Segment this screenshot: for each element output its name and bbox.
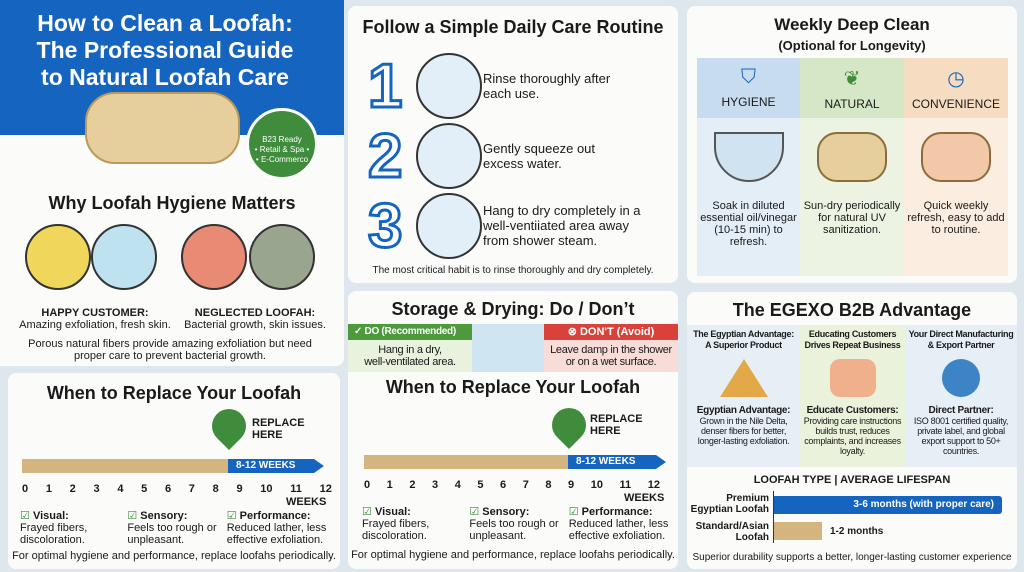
column: convenience (904, 58, 1008, 276)
text: happy customer: Amazing exfoliation, fresh skin. (19, 319, 171, 331)
text: happy customer (19, 307, 171, 331)
step 2: 2 (368, 122, 402, 191)
text: neglected: Bacterial growth, skin issues. (184, 319, 326, 331)
checklist: ☑ Sensory: (469, 506, 529, 518)
checklist: Reduced lather, less effective exfoliation. (569, 518, 668, 542)
icon: happy face (25, 224, 91, 290)
column: hygiene: Soak in diluted essential oil/vinegar (10-15 min) to refresh. (700, 200, 797, 248)
axis labels: 6 (500, 479, 506, 491)
footer text: For optimal hygiene and performance, replace loofahs periodically. (12, 550, 336, 562)
heading: (Optional for Longevity) (778, 38, 926, 53)
column: hygiene (697, 58, 800, 276)
label: replace here: REPLACE (590, 413, 643, 425)
badge: B23 Ready (262, 135, 302, 144)
footer text: Superior durability supports a better, longer-lasting customer experience (692, 552, 1012, 563)
step 2: Gently squeeze out (483, 141, 595, 156)
axis labels: 7 (189, 483, 195, 495)
timeline bar (22, 459, 324, 473)
panel: replace left (8, 373, 340, 569)
checklist: ☑ Sensory: (127, 510, 187, 522)
axis labels: 12 (648, 479, 660, 491)
axis labels: 8 (545, 479, 552, 491)
label: replace here: REPLACE (252, 417, 305, 429)
title: How to Clean a Loofah: (37, 10, 293, 36)
checklist: Feels too rough or unpleasant. (469, 518, 559, 542)
axis labels: 3 (93, 483, 100, 495)
bar chart: lifespan: LOOFAH TYPE | AVERAGE LIFESPAN (754, 474, 950, 486)
do box: Hang in a dry, (378, 344, 442, 356)
do box: well-ventilated area. (364, 356, 456, 368)
column: educate: Educate Customers: (807, 405, 898, 416)
column: egyptian: Egyptian Advantage: (697, 405, 790, 416)
dont box (544, 324, 678, 372)
dont box: Leave damp in the shower (550, 344, 672, 356)
heading: When to Replace Your Loofah (47, 383, 301, 403)
column: educate: Providing care instructions builds trust, reduces complaints, and increases loyalty. (804, 416, 901, 456)
bar chart: lifespan: Egyptian Loofah (691, 504, 769, 515)
column: egyptian (687, 325, 800, 467)
panel: weekly deep clean (687, 6, 1017, 283)
axis labels: 10 (260, 483, 273, 495)
axis labels: 8 (213, 483, 219, 495)
column: convenience: Quick weekly refresh, easy to add to routine. (907, 200, 1005, 236)
bar chart: lifespan: Premium (726, 493, 769, 504)
axis labels: 3 (432, 479, 438, 491)
column: partner: Your Direct Manufacturing (909, 329, 1013, 339)
axis labels: 1 (387, 479, 393, 491)
title: to Natural Loofah Care (41, 64, 289, 90)
label: replace here (252, 417, 305, 441)
column: hygiene: HYGIENE (721, 95, 776, 109)
checklist: ☑ Visual: (20, 510, 69, 522)
heading: Storage & Drying: Do / Don’t (392, 299, 634, 319)
heading: Follow a Simple Daily Care Routine (362, 17, 664, 37)
step 2 (368, 122, 595, 191)
panel: B2B advantage (687, 292, 1017, 569)
label: replace here: HERE (252, 429, 283, 441)
axis labels (364, 479, 660, 491)
checklist: Frayed fibers, discoloration. (362, 518, 429, 542)
timeline bar: 8-12 WEEKS (236, 460, 295, 471)
panel: replace left: WEEKS (286, 496, 326, 508)
header band (0, 0, 344, 135)
column: egyptian: A Superior Product (705, 340, 782, 350)
icon: sad face (181, 224, 247, 290)
axis labels: 2 (70, 483, 76, 495)
axis labels: 11 (620, 479, 631, 491)
step 3: well-ventiiated area away (483, 218, 629, 233)
axis labels: 2 (409, 479, 415, 491)
heading: replace: When to Replace Your Loofah (386, 377, 640, 397)
column: partner: & Export Partner (928, 340, 994, 350)
step 2: excess water. (483, 156, 562, 171)
title (36, 10, 293, 90)
checklist: Reduced lather, less effective exfoliation. (227, 522, 326, 546)
step 3: from shower steam. (483, 233, 597, 248)
column: educate: Drives Repeat Business (805, 340, 900, 350)
axis labels: 12 (320, 483, 332, 495)
checklist: Frayed fibers, discoloration. (20, 522, 87, 546)
do box (348, 324, 472, 372)
axis labels: 9 (568, 479, 574, 491)
badge: • Retail & Spa • (255, 145, 309, 154)
checklist (362, 506, 668, 542)
checklist: ☑ Visual: (362, 506, 411, 518)
axis labels (22, 483, 332, 495)
axis labels: 4 (117, 483, 123, 495)
panel: storage and replace: WEEKS (624, 492, 664, 504)
dont box: or on a wet surface. (566, 356, 656, 368)
bar chart: lifespan: Standard/Asian (696, 521, 769, 532)
step 3: Hang to dry completely in a (483, 203, 641, 218)
column: educate (800, 325, 905, 467)
bar chart: lifespan: 3-6 months (with proper care) (853, 499, 994, 510)
shower image (472, 324, 544, 372)
step 3: 3 (368, 192, 402, 261)
panel: daily care (348, 6, 678, 283)
badge (246, 108, 318, 180)
heading: The EGEXO B2B Advantage (733, 300, 971, 320)
icon: clean loofah (91, 224, 157, 290)
do box: ✓ DO (Recommended) (354, 326, 456, 337)
column: partner (905, 325, 1017, 467)
axis labels: 11 (290, 483, 302, 495)
axis labels: 6 (165, 483, 171, 495)
step 1: Rinse thoroughly after (483, 71, 610, 86)
icon: pin (205, 402, 253, 450)
icon: dirty loofah (249, 224, 315, 290)
axis labels: 1 (46, 483, 52, 495)
column: educate: Educating Customers (809, 329, 896, 339)
axis labels: 0 (364, 479, 370, 491)
footer text: The most critical habit is to rinse thoroughly and dry completely. (372, 265, 654, 276)
badge: • E-Commerco (256, 155, 308, 164)
column: natural: ❦ (844, 68, 860, 90)
checklist: ☑ Performance: (227, 510, 311, 522)
panel: storage and replace (348, 291, 678, 569)
axis labels: 5 (477, 479, 483, 491)
text: neglected (184, 307, 326, 331)
bar chart: lifespan (691, 474, 1002, 543)
label: replace here (590, 413, 643, 437)
caption: Porous natural fibers provide amazing exfoliation but need proper care to prevent bacterial growth. (28, 338, 312, 362)
axis labels: 7 (523, 479, 529, 491)
column: hygiene: ⛉ (741, 66, 756, 88)
text: neglected: NEGLECTED LOOFAH: (195, 307, 315, 319)
column: convenience: ◷ (947, 68, 965, 90)
axis labels: 0 (22, 483, 28, 495)
column: convenience: CONVENIENCE (912, 97, 1000, 111)
footer text: For optimal hygiene and performance, replace loofahs periodically. (351, 549, 675, 561)
bar chart: lifespan: 1-2 months (830, 526, 883, 537)
column: natural: NATURAL (824, 97, 880, 111)
column: partner: Direct Partner: (929, 405, 993, 416)
step 1: each use. (483, 86, 539, 101)
icon: pin (545, 401, 593, 449)
column: natural: Sun-dry periodically for natural UV sanitization. (804, 200, 900, 236)
heading: why hygiene: Why Loofah Hygiene Matters (48, 193, 296, 213)
column: egyptian: Grown in the Nile Delta, denser fibers for better, longer-lasting exfoliation. (698, 416, 789, 446)
axis labels: 4 (455, 479, 461, 491)
timeline bar (364, 455, 666, 469)
checklist: ☑ Performance: (569, 506, 653, 518)
column: partner: ISO 8001 certified quality, private label, and global export support to 50+ countries. (914, 416, 1008, 456)
label: replace here: HERE (590, 425, 621, 437)
dont box: ⊗ DON'T (Avoid) (568, 326, 654, 338)
step 1: 1 (368, 52, 402, 121)
column: egyptian: The Egyptian Advantage: (693, 329, 794, 339)
checklist: Feels too rough or unpleasant. (127, 522, 217, 546)
heading (774, 15, 930, 53)
heading: Weekly Deep Clean (774, 15, 930, 34)
step 1 (368, 52, 610, 121)
text: happy customer: HAPPY CUSTOMER: (41, 307, 149, 319)
title: The Professional Guide (37, 37, 293, 63)
timeline bar: 8-12 WEEKS (576, 456, 635, 467)
column: natural (800, 58, 904, 276)
axis labels: 10 (591, 479, 603, 491)
loofah image (85, 92, 240, 164)
panel: header and hygiene (0, 0, 344, 366)
checklist (20, 510, 326, 546)
axis labels: 5 (141, 483, 147, 495)
bar chart: lifespan: Loofah (736, 532, 769, 543)
step 3 (368, 192, 641, 261)
axis labels: 9 (236, 483, 243, 495)
